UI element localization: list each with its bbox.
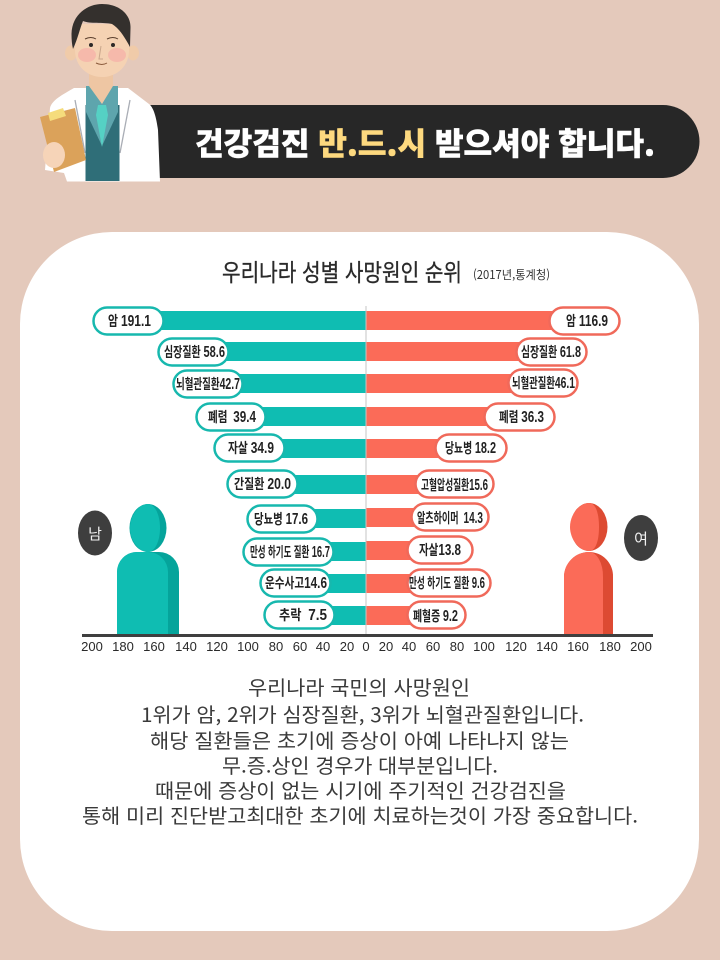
header banner	[150, 105, 700, 178]
chart title: 우리나라 성별 사망원인 순위	[222, 253, 462, 288]
icon: doctor character	[40, 4, 160, 182]
female label text: 폐혈증 9.2	[413, 608, 458, 625]
axis: 40	[316, 639, 330, 654]
panel: white card	[20, 232, 699, 931]
body text: 통해 미리 진단받고최대한 초기에 치료하는것이 가장 중요합니다.	[82, 800, 638, 829]
male value labels	[94, 308, 334, 628]
male label text: 암 191.1	[108, 313, 151, 330]
male bars	[130, 311, 366, 625]
female label text: 자살13.8	[419, 542, 461, 559]
male label text: 만성 하기도 질환 16.7	[250, 544, 330, 561]
axis	[81, 634, 653, 654]
badge: male: 남	[88, 523, 102, 544]
axis: 120	[505, 639, 527, 654]
male label text: 추락 7.5	[279, 607, 327, 624]
axis: 20	[379, 639, 393, 654]
axis: 180	[599, 639, 621, 654]
male label text: 당뇨병 17.6	[254, 511, 308, 528]
icon: female figure	[564, 503, 613, 635]
female label text: 암 116.9	[566, 313, 608, 330]
body text: 우리나라 국민의 사망원인	[248, 672, 470, 701]
axis: 20	[340, 639, 354, 654]
female label text: 뇌혈관질환46.1	[512, 375, 575, 392]
female label text	[409, 313, 608, 625]
male label text: 심장질환 58.6	[164, 344, 225, 361]
female label text: 만성 하기도 질환 9.6	[409, 575, 485, 592]
female label text: 알츠하이머 14.3	[417, 510, 483, 527]
axis: 0	[362, 639, 370, 654]
female label text: 당뇨병 18.2	[445, 440, 496, 457]
male label text: 운수사고14.6	[265, 575, 327, 592]
axis: 60	[426, 639, 440, 654]
axis: 40	[402, 639, 416, 654]
axis: 60	[293, 639, 307, 654]
badge: male	[78, 510, 112, 556]
body text	[82, 672, 638, 829]
male label text: 간질환 20.0	[234, 476, 291, 493]
female value labels	[408, 308, 620, 628]
icon: male figure	[117, 504, 179, 635]
male label text: 폐렴 39.4	[208, 409, 256, 426]
axis: 120	[206, 639, 228, 654]
axis: 160	[567, 639, 589, 654]
chart source note: (2017년,통계청)	[473, 266, 550, 283]
banner heading: 건강검진 반.드.시 받으셔야 합니다.	[195, 119, 655, 164]
axis: 160	[143, 639, 165, 654]
axis: 200	[630, 639, 652, 654]
body text: 때문에 증상이 없는 시기에 주기적인 건강검진을	[155, 775, 566, 804]
female label text: 폐렴 36.3	[499, 409, 544, 426]
axis: 80	[450, 639, 464, 654]
axis: 100	[237, 639, 259, 654]
axis: 180	[112, 639, 134, 654]
axis: 140	[536, 639, 558, 654]
axis: 200	[81, 639, 103, 654]
male label text	[108, 313, 330, 624]
female bars	[366, 311, 586, 625]
axis: 100	[473, 639, 495, 654]
female label text: 심장질환 61.8	[521, 344, 581, 361]
male label text: 자살 34.9	[228, 440, 274, 457]
badge: female	[624, 515, 658, 561]
body text: 무.증.상인 경우가 대부분입니다.	[222, 750, 498, 779]
badge: female: 여	[634, 528, 648, 549]
axis: 80	[269, 639, 283, 654]
female label text: 고혈압성질환15.6	[421, 477, 488, 494]
male label text: 뇌혈관질환42.7	[176, 376, 240, 393]
body text: 해당 질환들은 초기에 증상이 아예 나타나지 않는	[150, 725, 569, 754]
body text: 1위가 암, 2위가 심장질환, 3위가 뇌혈관질환입니다.	[141, 699, 584, 728]
axis: 140	[175, 639, 197, 654]
